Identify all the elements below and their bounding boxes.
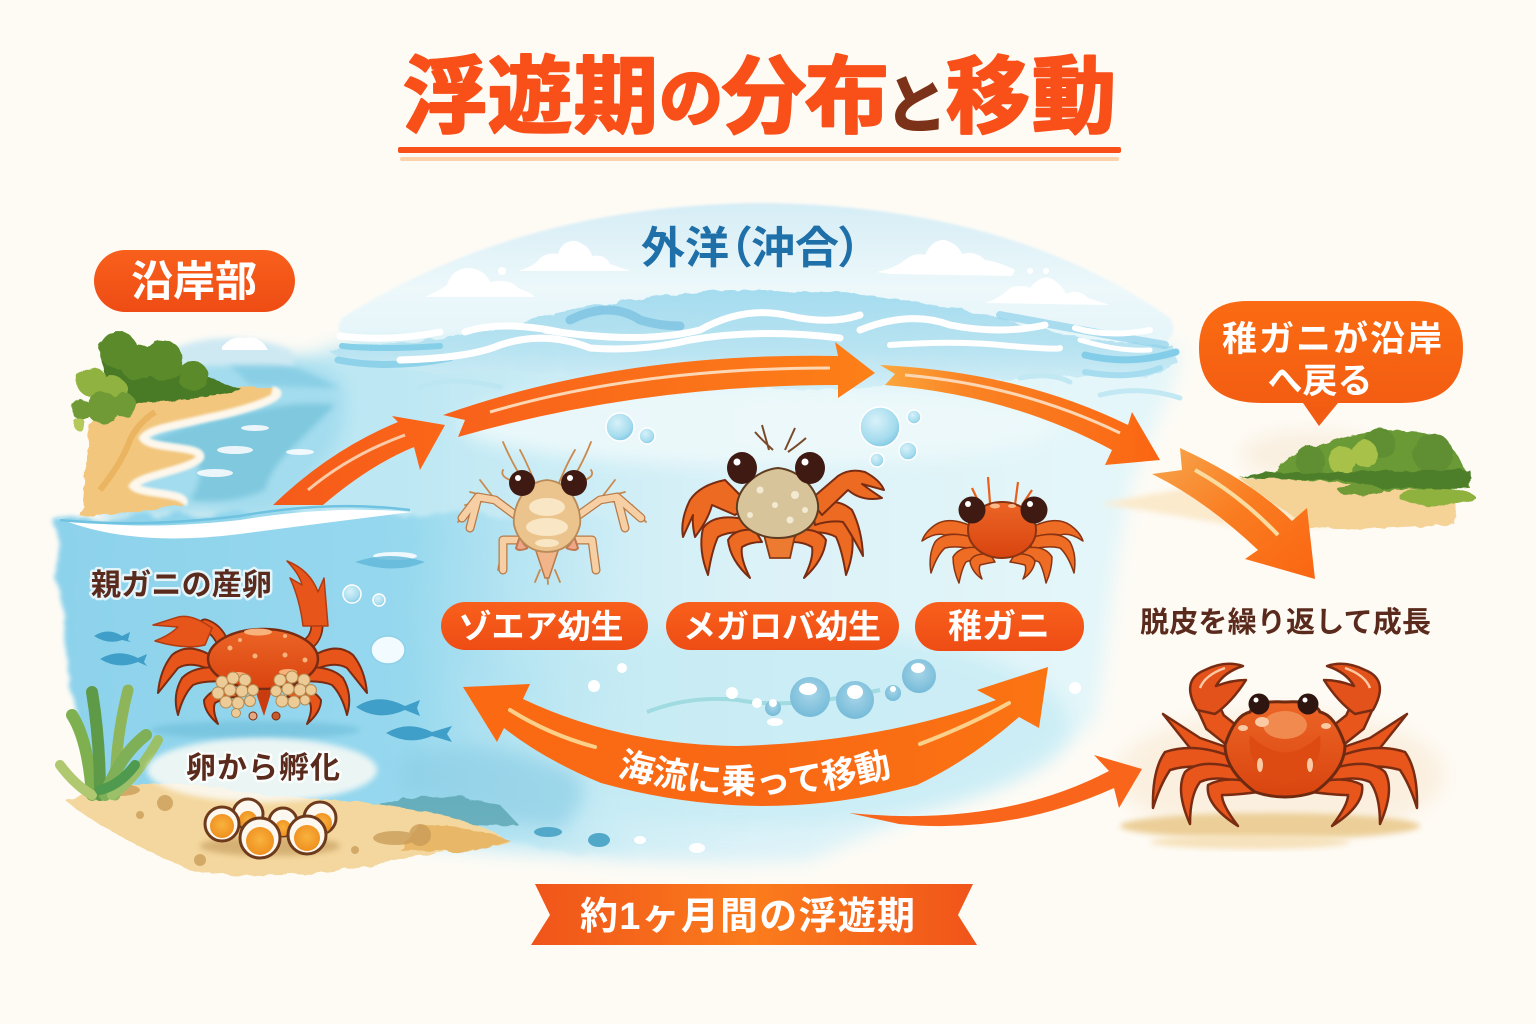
left coast scene	[55, 331, 640, 876]
white patch behind hatching label	[147, 738, 377, 802]
seabed shadow	[150, 721, 360, 739]
stage label: zoea: ゾエア幼生	[458, 608, 624, 645]
deeper water at bottom	[400, 747, 583, 830]
stage label: megalopa	[666, 602, 899, 650]
adult crab on sand	[1115, 664, 1445, 849]
egg clusters	[212, 671, 316, 718]
bubbles	[343, 407, 1081, 853]
banner: about one month: 約1ヶ月間の浮遊期	[580, 896, 915, 938]
sky cloud behind bushes	[165, 338, 295, 365]
callout: juveniles return to coast: 稚ガニが沿岸	[1222, 320, 1442, 359]
stage label: megalopa: メガロバ幼生	[683, 608, 881, 645]
title: と	[885, 72, 947, 141]
central water	[200, 345, 1180, 862]
callout: juveniles return to coast: へ戻る	[1267, 362, 1373, 401]
title: 布	[805, 50, 889, 144]
arrow: across open ocean	[443, 342, 875, 437]
stage label: juvenile	[915, 602, 1084, 651]
callout: juveniles return to coast	[1199, 301, 1463, 426]
badge: coast	[94, 250, 295, 312]
label: hatching from eggs: 卵から孵化	[186, 752, 340, 785]
megalopa larva	[682, 425, 884, 578]
title	[398, 50, 1121, 161]
eggs on the beach	[200, 799, 340, 858]
bushes left	[72, 331, 243, 431]
mother crab spawning	[153, 561, 367, 724]
offshore waves	[338, 310, 1180, 398]
label: molting and growth: 脱皮を繰り返して成長	[1140, 606, 1431, 639]
sky dome	[339, 203, 1173, 345]
large double-headed current arrow	[463, 667, 1048, 806]
stage label: zoea	[441, 602, 648, 650]
offshore sea band	[330, 290, 1178, 390]
bay water	[100, 352, 345, 520]
seaweed	[60, 690, 158, 795]
title: 遊	[488, 50, 572, 144]
heading: open ocean: 外洋（沖合）	[641, 224, 861, 273]
shoreline foam	[58, 510, 412, 538]
title: 分	[722, 50, 806, 144]
beach	[80, 387, 277, 516]
arrow: coast to ocean	[273, 416, 445, 505]
stage label: juvenile: 稚ガニ	[948, 608, 1050, 646]
title: 期	[574, 50, 658, 144]
right coast island	[1100, 428, 1475, 529]
title: 移	[946, 50, 1030, 144]
badge: coast: 沿岸部	[131, 258, 257, 305]
arrow: down to coast	[1152, 448, 1315, 579]
clouds	[425, 240, 1110, 305]
title: 動	[1032, 50, 1116, 144]
bottom sand	[65, 784, 510, 876]
arrow: ocean toward shore	[880, 365, 1160, 465]
title: の	[659, 63, 723, 135]
arrow: to adult crab	[849, 755, 1142, 826]
lower coastal water	[55, 513, 640, 860]
water patches	[197, 425, 417, 560]
juvenile crab	[922, 477, 1083, 583]
current label: 海流に乗って移動	[618, 748, 890, 796]
banner: about one month	[531, 884, 977, 945]
fish school	[94, 632, 452, 742]
open ocean scene	[200, 203, 1180, 862]
zoea larva	[458, 442, 646, 584]
title: 浮	[403, 50, 487, 144]
label: parent crab spawning: 親ガニの産卵	[91, 569, 272, 602]
